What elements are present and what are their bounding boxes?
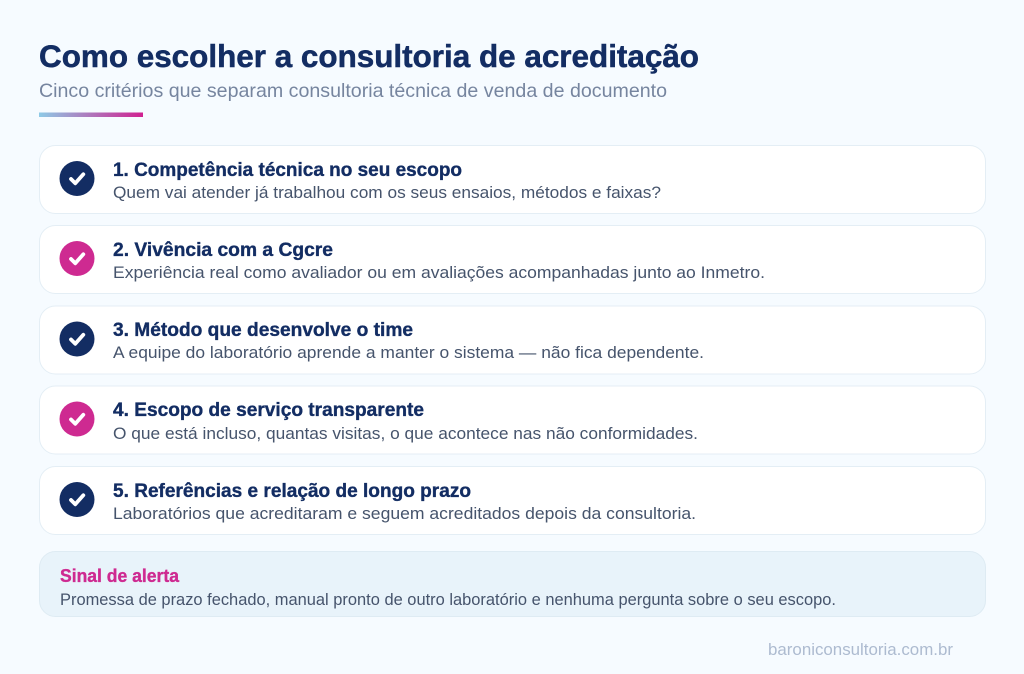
panel: criterion 3 <box>40 306 986 374</box>
callout: warning sign <box>40 552 986 616</box>
text: criterion 2: Experiência real como avaliador ou em avaliações acompanhadas junto ao Inmetro. <box>113 264 765 282</box>
heading: criterion 3: 3. Método que desenvolve o time <box>113 320 413 341</box>
text: warning: Promessa de prazo fechado, manual pronto de outro laboratório e nenhuma pergunta sobre o seu escopo. <box>60 591 836 609</box>
icon: navy check <box>60 322 94 356</box>
heading: warning: Sinal de alerta <box>60 566 180 586</box>
title: Como escolher a consultoria de acreditação <box>39 38 699 74</box>
panel: criterion 2 <box>40 226 986 294</box>
text: criterion 5: Laboratórios que acreditaram e seguem acreditados depois da consultoria. <box>113 505 696 523</box>
text: criterion 4: O que está incluso, quantas visitas, o que acontece nas não conformidades. <box>113 425 698 443</box>
panel: criterion 1 <box>40 146 986 214</box>
heading: criterion 4: 4. Escopo de serviço transparente <box>113 400 424 421</box>
heading: criterion 5: 5. Referências e relação de longo prazo <box>113 481 471 502</box>
heading: criterion 2: 2. Vivência com a Cgcre <box>113 240 333 261</box>
text: criterion 3: A equipe do laboratório aprende a manter o sistema — não fica dependente. <box>113 344 704 362</box>
text: criterion 1: Quem vai atender já trabalhou com os seus ensaios, métodos e faixas? <box>113 184 661 202</box>
panel: criterion 5 <box>40 466 986 534</box>
panel: criterion 4 <box>40 386 986 454</box>
icon: navy check <box>60 482 94 517</box>
heading: criterion 1: 1. Competência técnica no seu escopo <box>113 160 462 181</box>
subtitle: Cinco critérios que separam consultoria técnica de venda de documento <box>39 80 667 102</box>
footer website: baroniconsultoria.com.br <box>768 641 954 659</box>
icon: magenta check <box>60 402 94 436</box>
icon: magenta check <box>60 241 94 276</box>
icon: navy check <box>60 161 94 196</box>
accent gradient bar <box>39 112 143 117</box>
